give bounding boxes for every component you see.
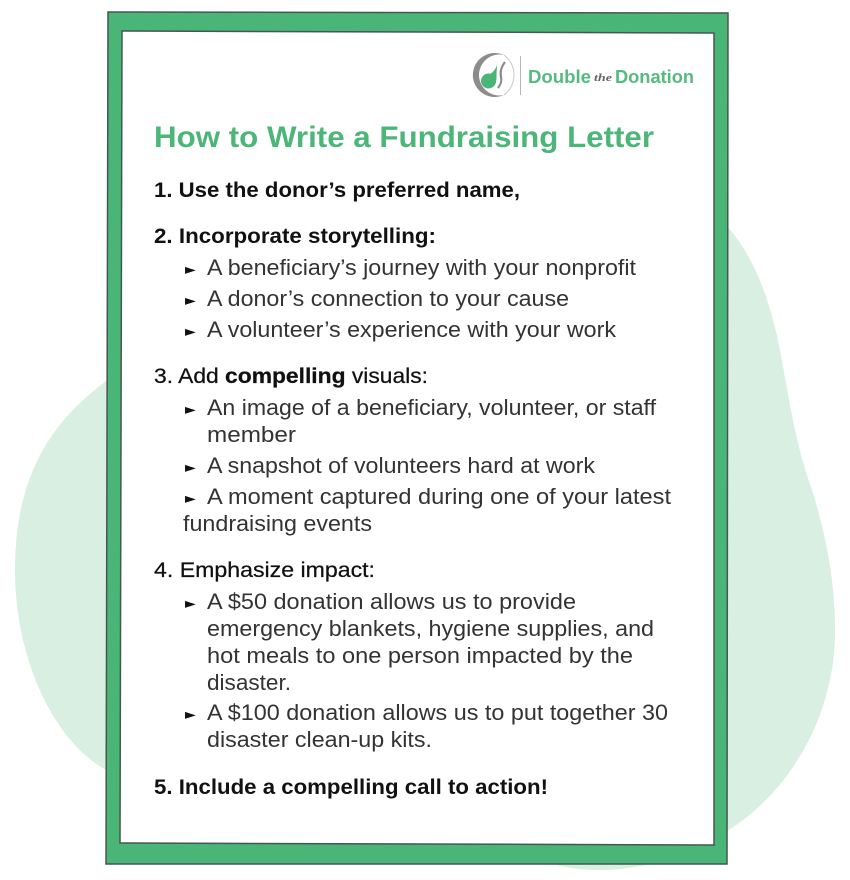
- step 2 heading: 2. Incorporate storytelling:: [154, 225, 436, 248]
- step 4 bullets: ►: [185, 707, 196, 723]
- step 4 bullets: disaster.: [207, 670, 291, 695]
- step 3: visuals: [154, 365, 671, 536]
- step 2 bullets: A volunteer’s experience with your work: [207, 317, 617, 342]
- panel: letter card with green frame: [106, 12, 728, 864]
- step 2 bullets: [185, 255, 636, 342]
- step 1 heading: 1. Use the donor’s preferred name,: [154, 179, 520, 202]
- step 3 bullets: ►: [185, 402, 196, 418]
- step 3 bullets: fundraising events: [183, 511, 372, 536]
- background blob: right: [550, 226, 835, 870]
- step 2 bullets: ►: [185, 293, 196, 309]
- divider in logo: [520, 56, 521, 95]
- step 2 bullets: A donor’s connection to your cause: [207, 286, 569, 311]
- title: How to Write a Fundraising Letter: [154, 121, 654, 154]
- logo: Double the Donation: [473, 53, 694, 97]
- step 3 bullets: ►: [185, 460, 196, 476]
- step 4 bullets: hot meals to one person impacted by the: [207, 643, 633, 668]
- step 3 bullets: A snapshot of volunteers hard at work: [207, 453, 596, 478]
- step 3 bullets: A moment captured during one of your latest: [207, 484, 671, 509]
- step 5 heading: 5. Include a compelling call to action!: [154, 776, 548, 799]
- logo wordmark: Double: [528, 67, 591, 87]
- step 2 bullets: ►: [185, 324, 196, 340]
- step 4 bullets: [185, 589, 668, 752]
- step 4 bullets: ►: [185, 596, 196, 612]
- step 3 bullets: [183, 395, 671, 536]
- step 2 bullets: ►: [185, 262, 196, 278]
- logo wordmark: the: [594, 73, 613, 84]
- step 4 heading: 4. Emphasize impact:: [154, 559, 375, 582]
- step 4 bullets: emergency blankets, hygiene supplies, and: [207, 616, 654, 641]
- step 2 bullets: A beneficiary’s journey with your nonprofit: [207, 255, 636, 280]
- step 3 bullets: ►: [185, 491, 196, 507]
- icon: logo ring and drop: [473, 53, 514, 97]
- logo wordmark: [528, 67, 694, 87]
- logo wordmark: Donation: [615, 67, 694, 87]
- step 4: impact: [154, 559, 668, 752]
- step 4 bullets: A $100 donation allows us to put together 30: [207, 700, 668, 725]
- step 4 bullets: A $50 donation allows us to provide: [207, 589, 576, 614]
- step 3 bullets: member: [207, 422, 296, 447]
- background blob: left: [15, 378, 110, 772]
- step 3 bullets: An image of a beneficiary, volunteer, or staff: [207, 395, 657, 420]
- step 4 bullets: disaster clean-up kits.: [207, 727, 432, 752]
- step 2: storytelling: [154, 225, 636, 342]
- step 3 heading: 3. Add compelling visuals:: [154, 365, 428, 388]
